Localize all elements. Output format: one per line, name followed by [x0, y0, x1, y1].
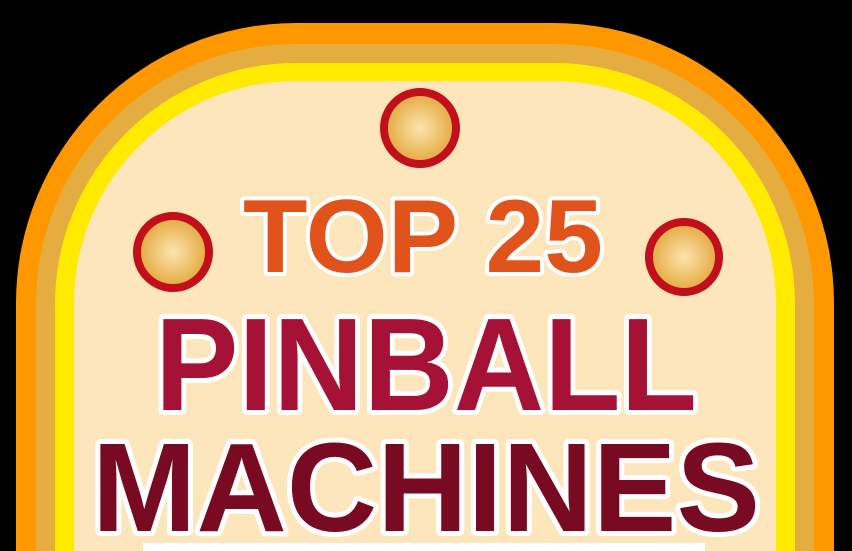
icon: left pinball bumper — [137, 216, 209, 288]
white banner strip — [143, 543, 705, 551]
title: PINBALL: PINBALL — [155, 291, 697, 438]
icon: right pinball bumper — [649, 222, 719, 292]
title: TOP 25: TOP 25 — [243, 179, 603, 295]
icon: top pinball bumper — [384, 92, 456, 164]
